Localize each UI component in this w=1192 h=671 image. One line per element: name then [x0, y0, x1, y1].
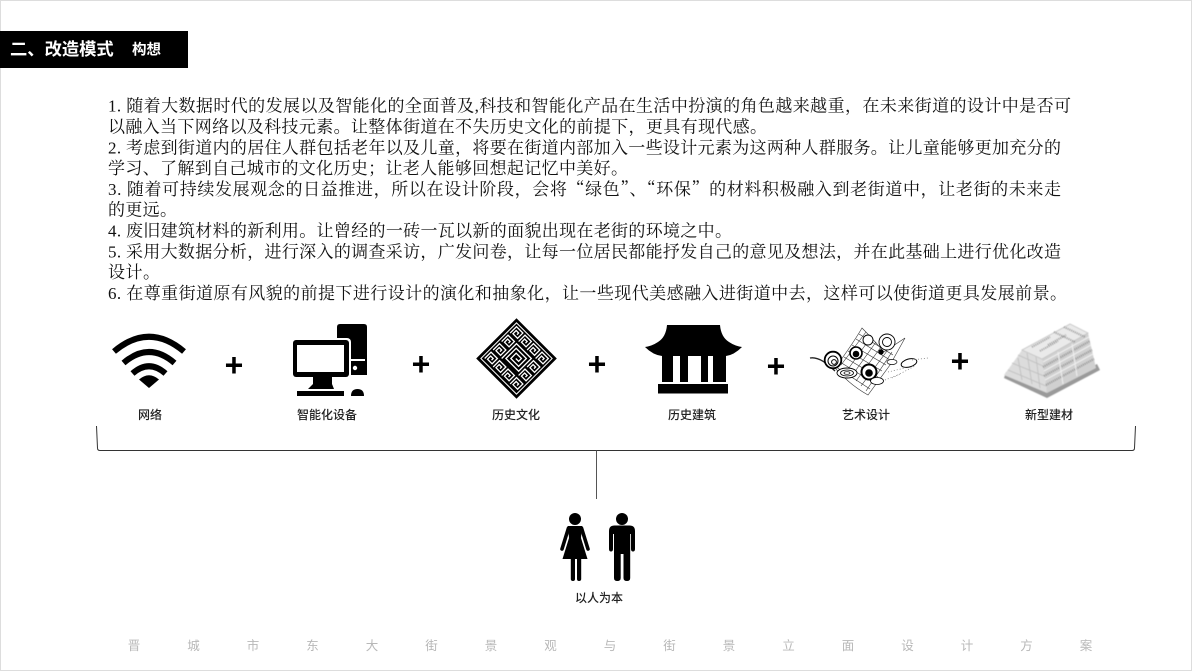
footer project title: 城	[187, 639, 200, 653]
footer project title: 方	[1020, 638, 1033, 653]
text block: design ideas: 学习、了解到自己城市的文化历史；让老人能够回想起记忆中美好。	[108, 159, 628, 178]
footer project title: 观	[544, 639, 557, 653]
icon: traditional building	[645, 325, 742, 394]
footer project title: 东	[306, 639, 319, 653]
text block: design ideas: 3. 随着可持续发展观念的日益推进，所以在设计阶段，会将“绿色”、“环保”的材料积极融入到老街道中，让老街的未来走	[108, 175, 1061, 200]
label: history and culture: 历史文化	[492, 407, 540, 422]
text block: design ideas: 1. 随着大数据时代的发展以及智能化的全面普及,科技和智能化产品在生活中扮演的角色越来越重，在未来街道的设计中是否可	[108, 96, 1071, 116]
footer project title: 景	[485, 639, 497, 653]
label: network: 网络	[138, 407, 162, 422]
text block: design ideas: 2. 考虑到街道内的居住人群包括老年以及儿童，将要在街道内部加入一些设计元素为这两种人群服务。让儿童能够更加充分的	[108, 138, 1061, 158]
text block: design ideas: 的更远。	[108, 200, 177, 220]
footer project title: 街	[663, 639, 676, 653]
icon: stacked building blocks	[1004, 324, 1100, 398]
title banner: 构想	[132, 40, 161, 58]
icon: woman and man	[562, 513, 635, 581]
icon: art design mesh	[810, 328, 928, 395]
footer project title: 晋	[128, 639, 140, 653]
footer project title	[128, 638, 1093, 653]
title banner	[0, 31, 188, 68]
label: historic architecture: 历史建筑	[668, 407, 716, 422]
icon: wifi	[114, 337, 184, 388]
text block: design ideas	[108, 96, 1071, 303]
label: smart devices: 智能化设备	[297, 407, 357, 422]
text block: design ideas: 以融入当下网络以及科技元素。让整体街道在不失历史文化的前提下，更具有现代感。	[108, 118, 767, 136]
title banner: 二、改造模式	[10, 39, 114, 59]
label: people oriented: 以人为本	[575, 591, 623, 605]
plus sign: +	[412, 346, 430, 382]
icon: computer	[291, 324, 367, 396]
footer project title: 设	[901, 638, 914, 653]
footer project title: 景	[723, 639, 735, 653]
plus sign: +	[588, 346, 606, 382]
icon: meander diamond	[476, 318, 557, 399]
footer project title: 案	[1080, 638, 1093, 653]
footer project title: 街	[425, 639, 438, 653]
label: new building materials: 新型建材	[1025, 407, 1073, 422]
footer project title: 大	[366, 639, 378, 653]
text block: design ideas: 设计。	[108, 263, 160, 282]
text block: design ideas: 4. 废旧建筑材料的新利用。让曾经的一砖一瓦以新的面貌出现在老街的环境之中。	[108, 222, 732, 240]
text block: design ideas: 6. 在尊重街道原有风貌的前提下进行设计的演化和抽象化，让一些现代美感融入进街道中去，这样可以使街道更具发展前景。	[108, 284, 1067, 303]
footer project title: 计	[961, 639, 973, 653]
plus sign: +	[951, 343, 969, 379]
plus sign: +	[767, 348, 785, 384]
footer project title: 立	[782, 638, 795, 653]
text block: design ideas: 5. 采用大数据分析，进行深入的调查采访，广发问卷，让每一位居民都能抒发自己的意见及想法，并在此基础上进行优化改造	[108, 242, 1061, 262]
footer project title: 面	[842, 639, 854, 653]
plus sign: +	[225, 347, 243, 383]
footer project title: 与	[604, 639, 616, 653]
label: art design: 艺术设计	[842, 407, 890, 422]
bracket connector	[96, 426, 1136, 499]
footer project title: 市	[247, 638, 259, 653]
